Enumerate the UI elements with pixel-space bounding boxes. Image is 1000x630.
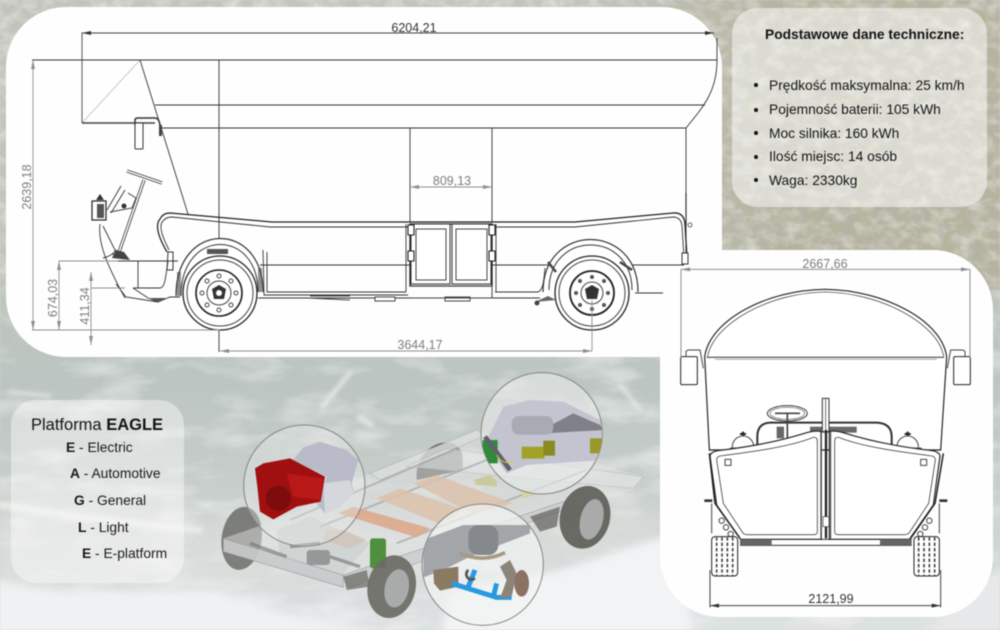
acronym list <box>66 440 167 561</box>
dimension: 674,03: 674,03 <box>46 279 60 317</box>
acronym list: E - E-platform <box>82 546 167 561</box>
side skirts <box>709 453 943 538</box>
callout: motor <box>244 425 365 546</box>
side view technical drawing <box>20 21 717 353</box>
doors <box>710 431 821 539</box>
steering and dashboard <box>92 171 162 298</box>
panel: front view backdrop <box>660 250 993 617</box>
dimension: 2639,18: 2639,18 <box>20 164 34 210</box>
dimension: 3644,17: 3644,17 <box>397 338 443 352</box>
dimension: 411,34: 411,34 <box>78 287 92 325</box>
acronym list: G - General <box>74 493 146 508</box>
roof arch <box>705 289 947 450</box>
axle bar <box>740 539 912 545</box>
center post <box>822 398 829 432</box>
list: technical data <box>754 78 965 188</box>
frame <box>223 430 643 587</box>
battery modules <box>323 475 513 548</box>
front view technical drawing <box>681 257 970 608</box>
acronym list: L - Light <box>78 520 129 535</box>
list: technical data: Waga: 2330kg <box>769 173 857 188</box>
chassis rendering <box>217 373 643 625</box>
acronym list: A - Automotive <box>70 466 161 481</box>
body rail <box>158 193 692 270</box>
dimension lines <box>681 269 970 357</box>
sill and lower body <box>258 224 663 306</box>
dimension: 2121,99: 2121,99 <box>808 592 854 606</box>
dimension lines <box>31 31 714 353</box>
dimension: 809,13: 809,13 <box>433 174 471 188</box>
list: technical data: Moc silnika: 160 kWh <box>769 126 899 141</box>
callout: suspension <box>422 504 543 625</box>
dimension: 6204,21: 6204,21 <box>391 21 437 35</box>
mirror <box>135 118 162 149</box>
panel: side view backdrop <box>6 7 722 357</box>
front bumper and floor <box>116 261 180 302</box>
heading: technical data: Podstawowe dane techniczne: <box>765 27 964 42</box>
front wheel <box>176 238 263 330</box>
tyres <box>712 537 939 576</box>
drive components <box>250 475 560 590</box>
far wheels <box>217 443 463 572</box>
callout: battery rail <box>481 373 606 494</box>
panel: EAGLE acronym <box>11 400 184 583</box>
door <box>408 224 495 298</box>
dimension: 2667,66: 2667,66 <box>802 257 848 271</box>
acronym list: E - Electric <box>66 440 133 455</box>
roof and body outline <box>32 38 717 352</box>
tanks <box>732 436 754 457</box>
rear wheel <box>543 240 638 330</box>
list: technical data: Pojemność baterii: 105 kWh <box>769 102 941 117</box>
steering wheel and seat <box>757 423 892 447</box>
list: technical data: Ilość miejsc: 14 osób <box>769 149 897 164</box>
near wheels <box>362 481 617 623</box>
front view lines <box>681 267 970 608</box>
list: technical data: Prędkość maksymalna: 25 km/h <box>769 78 965 93</box>
mirrors <box>686 350 965 368</box>
heading: Platforma EAGLE: Platforma EAGLE <box>31 416 163 434</box>
panel: technical data <box>732 8 987 207</box>
